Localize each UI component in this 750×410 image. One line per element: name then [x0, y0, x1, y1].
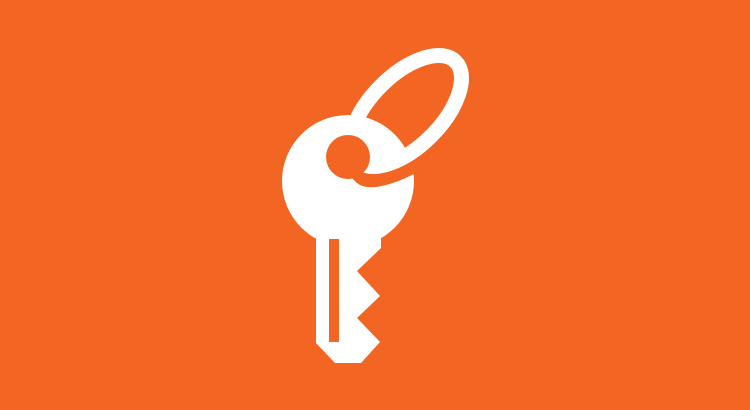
- key blade: [316, 226, 392, 363]
- icon: key: [282, 36, 481, 363]
- key ring: [331, 36, 481, 186]
- gap under ring: [348, 145, 428, 187]
- key slot: [329, 239, 339, 342]
- key head: [282, 115, 414, 247]
- key hole: [326, 135, 370, 179]
